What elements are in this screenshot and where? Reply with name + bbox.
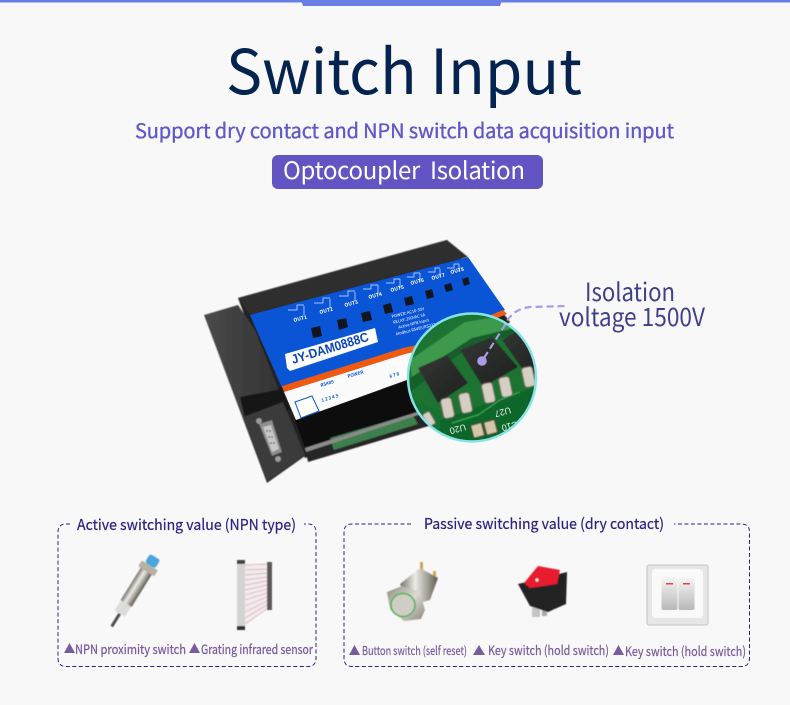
terminal labels: RS485 xyxy=(320,379,335,389)
caption: key switch: Key switch (hold switch) xyxy=(488,640,609,659)
small capacitors xyxy=(471,420,498,438)
icon: double wall switch xyxy=(647,565,708,625)
icon: grating infrared sensor xyxy=(237,560,272,630)
silkscreen references xyxy=(450,408,516,434)
relay labels: OUT1 xyxy=(293,314,308,324)
specification lines xyxy=(391,304,437,337)
callout leader line xyxy=(477,306,567,366)
callout text: isolation voltage xyxy=(559,273,706,334)
specification lines: POWER: AC10-30V xyxy=(391,306,426,320)
relay indicator windows xyxy=(311,277,470,338)
terminal labels: 6 7 8 xyxy=(389,371,400,380)
panel: active switching value xyxy=(58,514,316,666)
relay labels: OUT5 xyxy=(390,284,405,294)
caption: key switch second: Key switch (hold switch) xyxy=(625,641,746,660)
icon: NPN proximity switch xyxy=(104,552,163,631)
specification lines: Active NPN input xyxy=(398,317,430,331)
solder pads xyxy=(422,366,536,427)
product photo: JY-DAM0888C device xyxy=(204,240,510,483)
relay labels: OUT4 xyxy=(368,291,383,301)
caption: button switch xyxy=(349,642,467,659)
panel heading: Passive switching value (dry contact) xyxy=(424,513,664,534)
panel: passive switching value xyxy=(344,513,750,666)
network port icon xyxy=(295,396,319,418)
caption: button switch: Button switch (self reset) xyxy=(362,642,467,659)
badge: optocoupler isolation: Optocoupler Isolation xyxy=(283,151,525,186)
icon: red rocker switch xyxy=(518,566,567,617)
silkscreen references: C10 xyxy=(501,419,519,433)
model name plate: JY-DAM0888C xyxy=(289,329,371,367)
relay labels: OUT8 xyxy=(450,266,465,276)
terminal labels: POWER xyxy=(347,369,364,380)
terminal labels: 1 2 3 4 5 xyxy=(321,393,340,404)
callout text: isolation voltage: voltage 1500V xyxy=(559,298,706,334)
lens rim xyxy=(408,314,536,442)
specification lines: Modbus RS485/RS232 xyxy=(395,322,437,337)
relay labels: OUT7 xyxy=(431,272,446,282)
icon: metal button switch xyxy=(387,562,438,621)
relay contact glyphs xyxy=(288,264,459,315)
top accent bar xyxy=(0,0,790,6)
relay labels: OUT3 xyxy=(344,299,359,309)
orange stripe xyxy=(282,310,507,392)
relay labels xyxy=(293,266,465,324)
terminal labels xyxy=(320,369,400,404)
title: Switch Input xyxy=(226,22,582,112)
silkscreen references: U20 xyxy=(449,422,467,436)
blue label panel xyxy=(250,257,505,388)
silkscreen references: U27 xyxy=(494,405,512,419)
callout text: isolation voltage: Isolation xyxy=(585,273,675,309)
device enclosure xyxy=(204,240,510,483)
specification lines: RELAY: 250VAC 5A xyxy=(392,312,426,326)
caption: NPN proximity switch: NPN proximity switch xyxy=(75,639,186,658)
relay labels: OUT2 xyxy=(319,306,334,316)
magnified circuit board detail xyxy=(405,310,545,445)
DB9 serial connector xyxy=(256,418,282,462)
relay labels: OUT6 xyxy=(410,277,425,287)
optocoupler chips xyxy=(418,355,468,403)
caption: grating infrared sensor: Grating infrared sensor xyxy=(201,639,314,658)
white terminal strip xyxy=(284,345,440,420)
subtitle: Support dry contact and NPN switch data acquisition input xyxy=(135,115,674,144)
board shading xyxy=(410,318,512,377)
panel heading: Active switching value (NPN type) xyxy=(77,514,296,535)
